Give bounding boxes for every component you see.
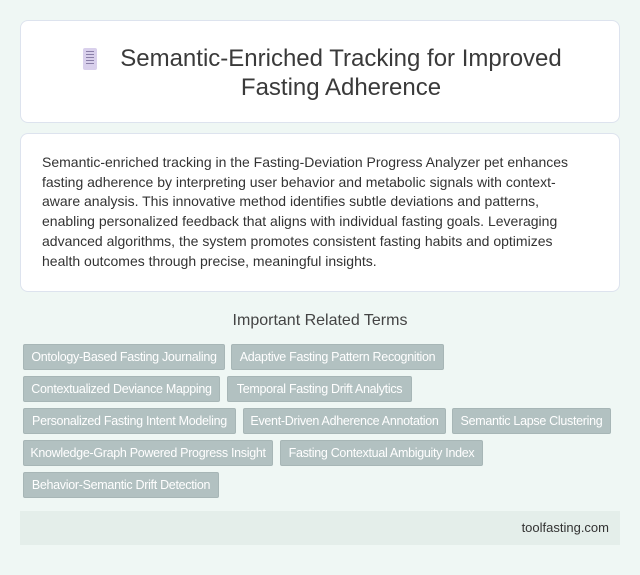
description text: Semantic-enriched tracking in the Fasting-Deviation Progress Analyzer pet enhances fasting adherence by interpreting user behavior and metabolic signals with context-aware analysis. This innovative method identifies subtle deviations and patterns, enabling personalized feedback that aligns with individual fasting goals. Leveraging advanced algorithms, the system promotes consistent fasting habits and optimizes health outcomes through precise, meaningful insights.: [42, 154, 568, 269]
footer text: toolfasting.com: [522, 520, 609, 535]
tags: Event-Driven Adherence Annotation: [250, 414, 439, 428]
icon: receipt: [83, 48, 97, 70]
header card: [20, 20, 620, 123]
tags: Behavior-Semantic Drift Detection: [32, 478, 210, 492]
tags: Adaptive Fasting Pattern Recognition: [240, 350, 435, 364]
tags: Ontology-Based Fasting Journaling: [31, 350, 217, 364]
tags: Semantic Lapse Clustering: [461, 414, 602, 428]
tags: Personalized Fasting Intent Modeling: [32, 414, 227, 428]
tags: Knowledge-Graph Powered Progress Insight: [30, 446, 266, 460]
title: Semantic-Enriched Tracking for Improved Fasting Adherence: [120, 45, 562, 101]
tags: Temporal Fasting Drift Analytics: [237, 382, 402, 396]
footer: [20, 511, 620, 545]
description card: [20, 133, 620, 292]
tags: Fasting Contextual Ambiguity Index: [289, 446, 474, 460]
section heading: Important Related Terms: [233, 312, 407, 329]
tags: Contextualized Deviance Mapping: [31, 382, 212, 396]
